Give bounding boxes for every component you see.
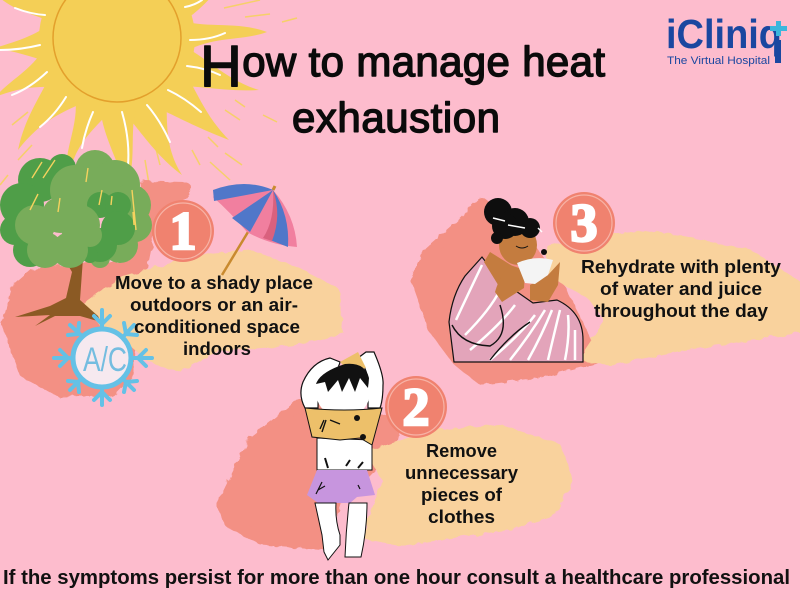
splotch: step 3 salmon [417, 204, 595, 379]
text: step 1: conditioned space [134, 316, 300, 337]
text: step 1: outdoors or an air- [130, 294, 298, 315]
text: step 3 [581, 256, 782, 321]
icon: A/C snowflake: A/C [83, 341, 127, 379]
text: step 2: Remove [426, 440, 497, 461]
logo: iCliniq: iCliniq [666, 11, 782, 57]
icon: tree [0, 150, 152, 326]
icon: sun [0, 0, 297, 190]
splotch: step 2 peach [369, 431, 567, 540]
text: step 2 [405, 440, 519, 527]
text: step 1: indoors [183, 338, 251, 359]
text: step 2: pieces of [421, 484, 503, 505]
text: step 2: unnecessary [405, 462, 519, 483]
text: step 1 [115, 272, 313, 359]
title: exhaustion [292, 94, 500, 141]
step 2 number badge [385, 376, 447, 438]
logo: iCliniq: The Virtual Hospital [667, 55, 770, 67]
title: H [200, 34, 242, 99]
text: step 3: throughout the day [594, 300, 769, 321]
splotch: step 1 peach [91, 256, 336, 366]
step 1 number badge [152, 200, 214, 262]
title: ow to manage heat [242, 38, 605, 85]
title [200, 34, 605, 141]
icon: umbrella [213, 184, 297, 275]
splotch: step 1 salmon [8, 187, 185, 391]
text: step 3: of water and juice [600, 278, 762, 299]
footer note: If the symptoms persist for more than one hour consult a healthcare professional [3, 567, 790, 589]
step 3 number badge [553, 192, 615, 254]
text: step 1: Move to a shady place [115, 272, 313, 293]
step 3 number badge: 3 [570, 193, 598, 253]
text: step 3: Rehydrate with plenty [581, 256, 782, 277]
splotch: step 2 salmon [223, 404, 395, 544]
step 2 number badge: 2 [402, 377, 430, 437]
splotch: step 3 peach [552, 237, 800, 359]
icon: woman drinking [449, 198, 583, 362]
step 1 number badge: 1 [170, 201, 196, 261]
text: step 2: clothes [428, 506, 495, 527]
icon: A/C snowflake [54, 310, 152, 405]
icon: child removing shirt [301, 352, 383, 560]
